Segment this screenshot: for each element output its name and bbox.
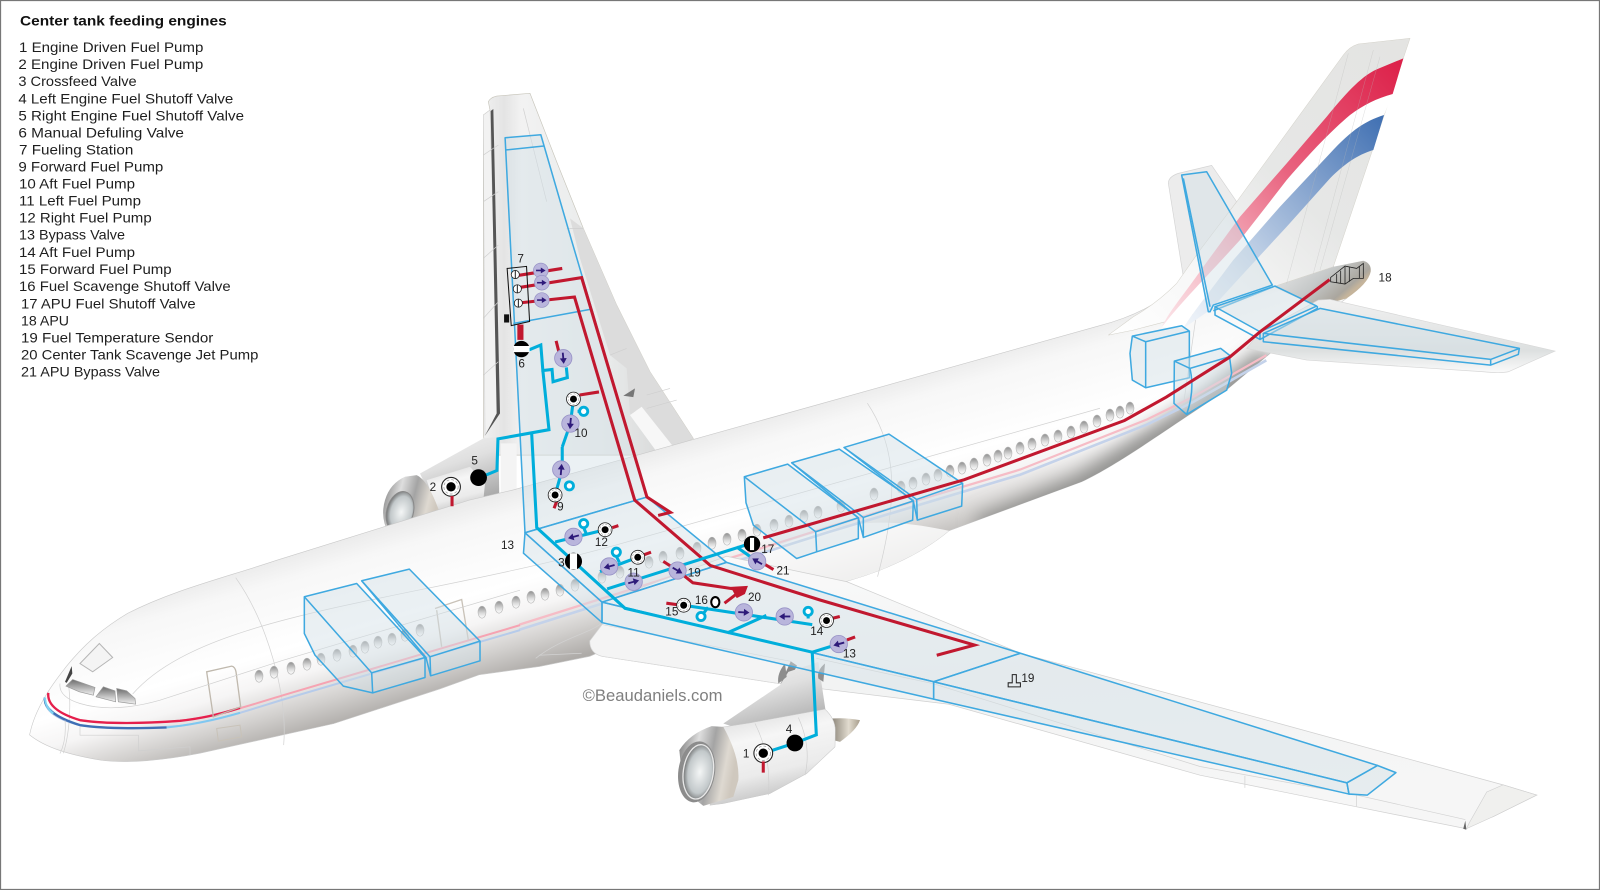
fin tank [1182,172,1272,312]
component number labels: 5 [471,454,478,467]
pylon [723,662,826,740]
fuel pumps [533,263,847,653]
centre tank outline [523,497,727,623]
component number labels: 10 [574,427,588,440]
wingtip [1466,785,1537,829]
legend items: 20 Center Tank Scavenge Jet Pump [21,347,259,363]
fueling station [504,266,530,326]
far wing tank outline [505,135,647,533]
legend items: 5 Right Engine Fuel Shutoff Valve [18,107,244,123]
component number labels: 20 [748,591,761,604]
legend items: 14 Aft Fuel Pump [19,244,135,260]
near horizontal stabilizer [1247,299,1555,373]
legend items: 21 APU Bypass Valve [21,364,160,380]
legend items: 11 Left Fuel Pump [19,193,141,209]
legend items: 2 Engine Driven Fuel Pump [18,56,204,72]
component number labels: 19 [1021,672,1034,685]
component number labels: 12 [595,536,608,549]
red fuel lines [517,268,1330,655]
copyright: ©Beaudaniels.com [583,687,722,705]
tail fuel tanks [1130,172,1519,414]
legend items: 10 Aft Fuel Pump [19,176,135,192]
legend [18,14,259,380]
nacelle [710,709,835,805]
tail cone [1273,261,1371,307]
legend items: 6 Manual Defuling Valve [18,124,184,140]
cyan fuel lines [480,345,839,753]
rear box tank [1130,326,1189,388]
legend items [18,39,259,380]
flap fairing [590,625,791,684]
intake [674,739,719,805]
blue stripe [1183,115,1384,328]
APU [1331,263,1363,284]
legend items: 7 Fueling Station [19,141,133,157]
stabilizer tank [1263,308,1519,359]
component number labels: 9 [557,500,564,513]
component number labels: 4 [786,723,793,736]
near wing [590,556,1537,830]
component number labels: 18 [1379,272,1392,285]
near engine [674,662,860,806]
jet pump [731,586,748,598]
near wing tank outline [602,562,1396,795]
legend items: 1 Engine Driven Fuel Pump [19,39,204,55]
fuselage aft underside shading [980,357,1270,531]
legend items: 17 APU Fuel Shutoff Valve [21,295,196,311]
far engine [382,437,517,535]
component number labels: 15 [665,605,679,618]
legend items: 12 Right Fuel Pump [19,210,152,226]
component number labels: 17 [761,543,774,556]
legend items: 18 APU [21,312,69,328]
component number labels: 13 [843,647,856,660]
vertical tail fin with stripes [1108,38,1410,335]
cowl ring [679,726,738,806]
flap shading [483,110,498,435]
component number labels: 7 [517,252,524,265]
shutoff valves 4 and 5 [470,469,803,751]
component number labels: 1 [743,747,749,760]
far horizontal stabilizer [1168,165,1237,277]
component number labels: 19 [688,567,701,580]
legend items: 16 Fuel Scavenge Shutoff Valve [19,278,231,294]
rear curved tank [1174,348,1232,414]
stabilizer centre tank [1215,286,1317,332]
legend items: 13 Bypass Valve [19,227,125,243]
tank fuel pump fans [548,392,833,627]
legend items: 3 Crossfeed Valve [18,73,137,89]
trailing edge flap lines [816,658,1465,820]
component number labels: 11 [628,567,640,580]
exhaust cone [832,718,860,742]
fuel temperature sensor 19 [1008,675,1020,687]
component number labels: 21 [777,565,790,578]
component number labels: 6 [518,357,525,370]
far wing [483,93,693,455]
aft-of-wing fuselage fuel tanks [744,434,963,558]
red stripe [1162,58,1403,327]
legend items: 19 Fuel Temperature Sendor [21,329,214,345]
forward fuselage fuel tanks [304,569,480,693]
fuselage cheatline [45,355,1266,728]
valves 3, 6, 16, 17 [513,341,760,607]
fuselage [30,266,1347,762]
recirculation loops [565,407,812,621]
component number labels: 2 [430,481,436,494]
component number labels: 13 [501,539,514,552]
component number labels [430,252,1392,760]
legend title: Center tank feeding engines [20,14,227,29]
legend items: 4 Left Engine Fuel Shutoff Valve [18,90,234,106]
component number labels: 14 [810,625,824,638]
component number labels: 3 [558,556,565,569]
cabin windows [255,402,1134,682]
legend items: 15 Forward Fuel Pump [19,261,172,277]
component number labels: 16 [695,594,708,607]
nose details: cockpit windows and doors [60,590,520,755]
belly fairing [719,523,949,594]
legend items: 9 Forward Fuel Pump [18,158,164,174]
engine driven fuel pumps [442,477,773,773]
white stripe [1162,94,1393,328]
